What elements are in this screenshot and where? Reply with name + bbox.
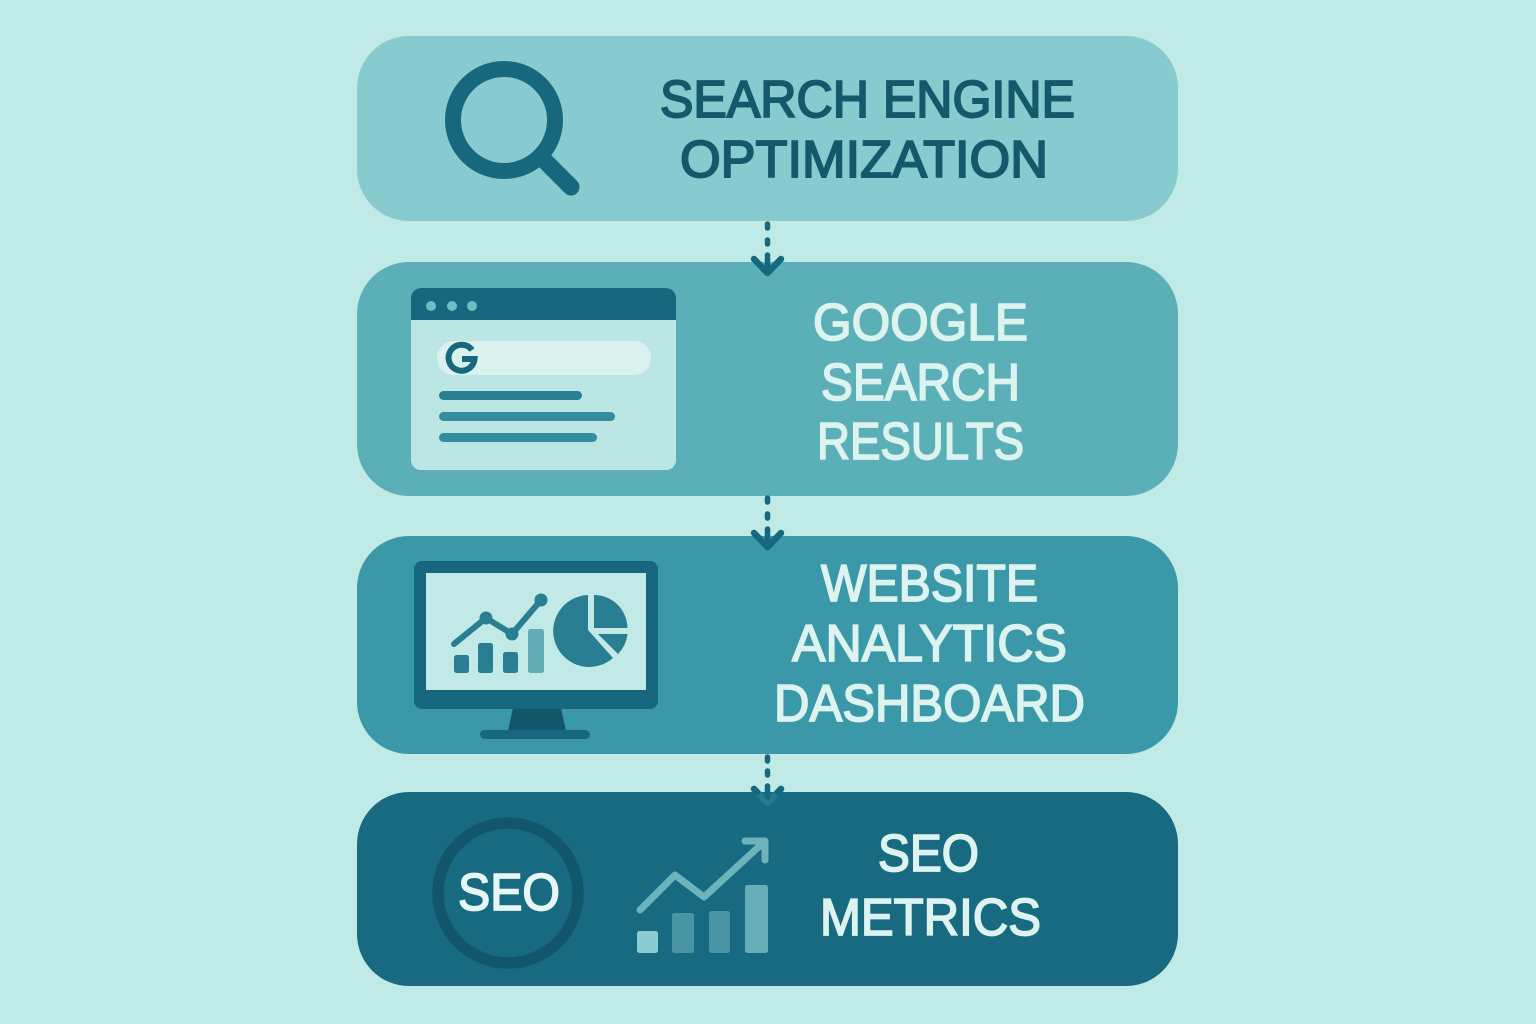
panel: seo metrics: [357, 792, 1178, 986]
heading: website analytics dashboard: ANALYTICS: [792, 615, 1067, 673]
heading: website analytics dashboard: WEBSITE: [821, 555, 1038, 613]
icon: letter G: [449, 345, 474, 371]
heading: google search results: GOOGLE: [813, 294, 1028, 352]
panel: search engine optimization: [357, 36, 1178, 221]
arrow: step 1 to step 2: [754, 224, 781, 273]
icon: browser window: [411, 288, 676, 470]
heading: google search results: SEARCH: [821, 354, 1020, 412]
icon: seo badge: SEO: [458, 864, 560, 922]
heading: website analytics dashboard: [774, 555, 1085, 733]
arrow: step 3 to step 4: [754, 757, 781, 803]
pie chart: [553, 595, 628, 667]
heading: seo metrics: [820, 825, 1041, 947]
line chart: [454, 594, 548, 644]
heading: search engine optimization: [660, 71, 1075, 189]
icon: growth chart: [637, 841, 768, 953]
panel: google search results: [357, 262, 1178, 496]
panel: website analytics dashboard: [357, 536, 1178, 754]
heading: seo metrics: SEO: [878, 825, 979, 883]
icon: monitor with charts: [414, 561, 658, 739]
icon: magnifying glass: [453, 69, 571, 187]
heading: google search results: [813, 294, 1028, 471]
heading: seo metrics: METRICS: [820, 889, 1041, 947]
heading: search engine optimization: OPTIMIZATION: [680, 131, 1048, 189]
icon: seo badge: [438, 823, 578, 963]
heading: search engine optimization: SEARCH ENGINE: [660, 71, 1075, 129]
heading: website analytics dashboard: DASHBOARD: [774, 675, 1085, 733]
bar chart: [454, 629, 544, 673]
heading: google search results: RESULTS: [817, 413, 1024, 471]
arrow: step 2 to step 3: [754, 498, 781, 547]
